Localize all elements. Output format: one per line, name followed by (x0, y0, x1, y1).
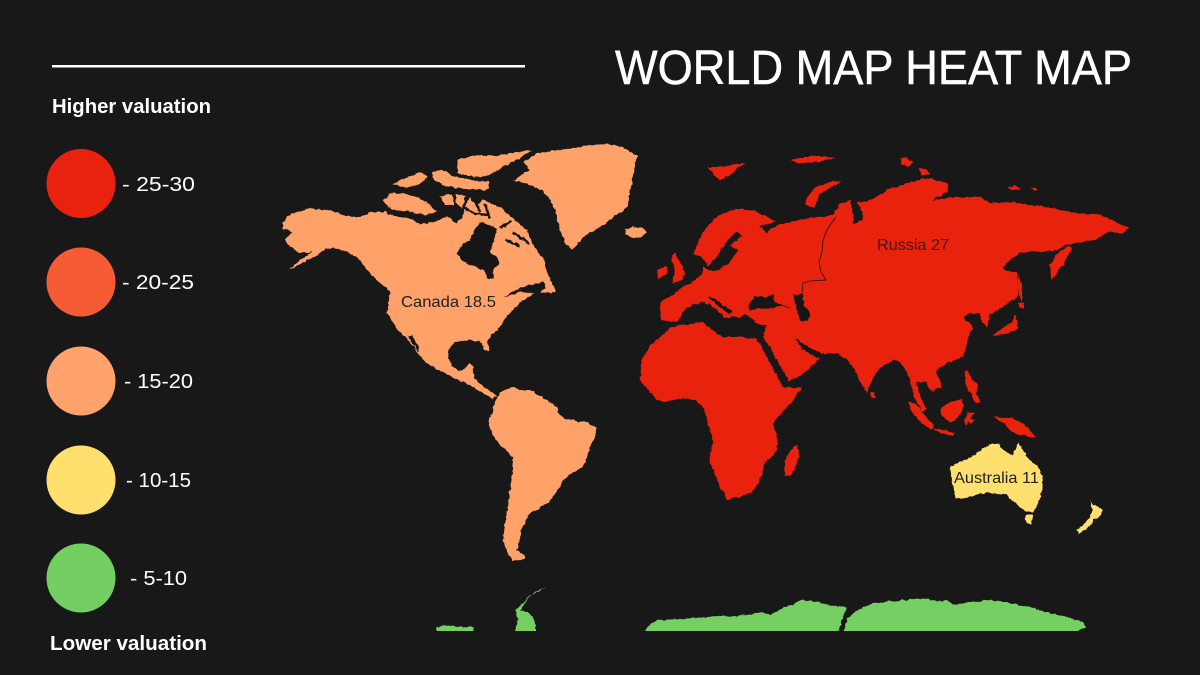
label: Russia: Russia 27 (877, 237, 949, 254)
Persian Gulf (795, 339, 820, 358)
Borneo (940, 399, 964, 422)
borders of Russia (775, 217, 836, 308)
Sumatra (908, 401, 934, 430)
legend item 10-15: - 10-15 (126, 470, 191, 492)
Kamchatka (1050, 245, 1072, 280)
South America (488, 387, 597, 561)
Gulf of St Lawrence (504, 282, 546, 298)
Gulf of California (408, 335, 420, 352)
channel lines (465, 200, 530, 246)
Philippines (965, 371, 981, 403)
world map (283, 144, 1130, 634)
New Guinea (993, 416, 1036, 438)
Sakhalin (1018, 274, 1022, 302)
Caspian Sea (793, 294, 810, 321)
legend item 5-10: - 5-10 (130, 568, 187, 590)
legend item 20-25: - 20-25 (122, 272, 194, 294)
legend (46, 96, 211, 655)
map coastlines (283, 144, 1130, 634)
Parry Islands (392, 170, 490, 190)
East Antarctica (843, 598, 1086, 634)
region: North America and Greenland (283, 144, 647, 561)
Svalbard (707, 163, 745, 180)
legend item 25-30: - 25-30 (122, 174, 195, 196)
Greenland (513, 144, 637, 250)
legend item 20-25 (46, 248, 194, 316)
Antarctica (437, 587, 1086, 634)
Madagascar (784, 445, 799, 476)
Australia and New Zealand (950, 442, 1103, 534)
Iceland (625, 227, 647, 238)
legend item 5-10 (46, 544, 187, 612)
Arctic channels (465, 200, 530, 246)
New Siberian Islands (1007, 186, 1038, 191)
Antarctic Peninsula (513, 587, 547, 634)
legend item 25-30 (46, 149, 195, 218)
North America mainland (283, 197, 556, 399)
West Antarctica (643, 600, 847, 634)
legend heading: lower valuation: Lower valuation (50, 633, 207, 655)
Victoria Island (383, 193, 437, 215)
Antarctic islands (437, 625, 474, 634)
Australia (950, 442, 1043, 512)
label: Canada: Canada 18.5 (401, 294, 496, 311)
Ireland (657, 266, 667, 279)
New Zealand (1077, 500, 1103, 534)
Great Britain (671, 253, 685, 284)
Severnaya Zemlya (900, 157, 930, 175)
region: Europe, Asia and Africa (640, 156, 1130, 500)
Adriatic Sea (708, 297, 732, 314)
Japan (992, 302, 1024, 336)
Franz Josef Land (790, 156, 835, 163)
legend heading: higher valuation: Higher valuation (52, 96, 211, 118)
Ellesmere Island (457, 150, 532, 177)
inland seas and gulfs (708, 294, 820, 358)
title: WORLD MAP HEAT MAP (615, 42, 1132, 95)
Africa (640, 322, 802, 500)
Arctic islands (440, 194, 466, 208)
Tasmania (1025, 515, 1033, 524)
Hudson Bay (457, 222, 500, 278)
Sulawesi (964, 412, 976, 426)
legend item 15-20: - 15-20 (124, 371, 193, 393)
Novaya Zemlya (805, 180, 843, 208)
Java (933, 428, 955, 436)
Sri Lanka (870, 392, 876, 399)
Eurasia mainland (660, 178, 1130, 412)
title rule (52, 65, 525, 68)
label: Australia: Australia 11 (954, 470, 1039, 487)
Black Sea (748, 294, 783, 311)
legend item 10-15 (46, 446, 191, 514)
legend item 15-20 (46, 346, 193, 416)
